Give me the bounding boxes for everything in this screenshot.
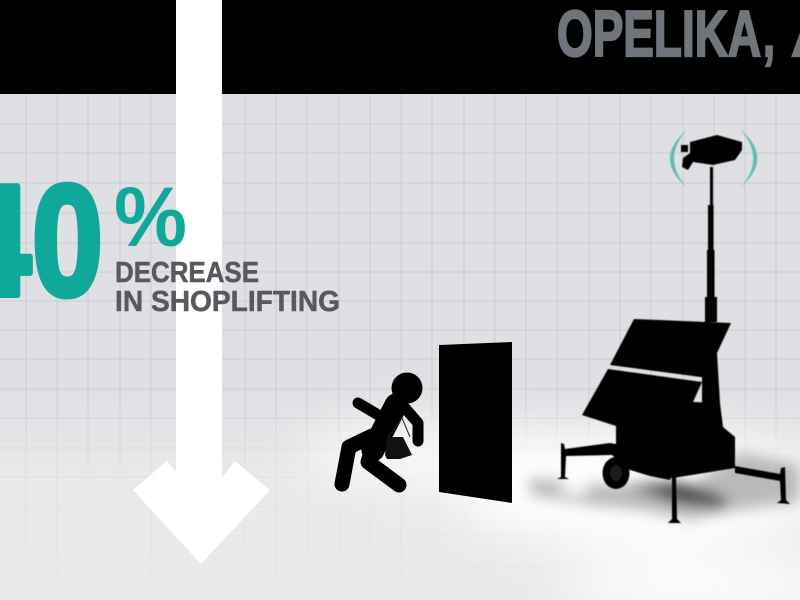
icon: door bbox=[439, 342, 512, 503]
white floor glow bbox=[300, 423, 800, 600]
caption: decrease in shoplifting: IN SHOPLIFTING bbox=[115, 286, 340, 318]
telescopic mast bbox=[705, 167, 717, 322]
caption: decrease in shoplifting: DECREASE bbox=[115, 257, 259, 289]
caption: decrease in shoplifting bbox=[115, 257, 340, 318]
upper solar panel bbox=[610, 319, 731, 378]
floor shadows bbox=[530, 452, 800, 520]
icon: mobile surveillance trailer bbox=[557, 129, 790, 523]
rear legs and frame bbox=[557, 443, 672, 480]
statistic: 40 percent: 0 bbox=[32, 153, 103, 329]
icon: white down arrow bbox=[133, 0, 270, 564]
lower solar panel bbox=[582, 369, 720, 430]
equipment body bbox=[616, 353, 735, 478]
icon: shoplifter figure with bag bbox=[342, 372, 422, 485]
camera head bbox=[682, 135, 742, 170]
front legs bbox=[668, 476, 681, 523]
percent sign: % bbox=[114, 170, 187, 264]
statistic: 40 percent bbox=[0, 153, 103, 329]
camera signal arcs bbox=[670, 129, 757, 188]
wheel bbox=[602, 457, 630, 489]
header band bbox=[0, 0, 800, 94]
